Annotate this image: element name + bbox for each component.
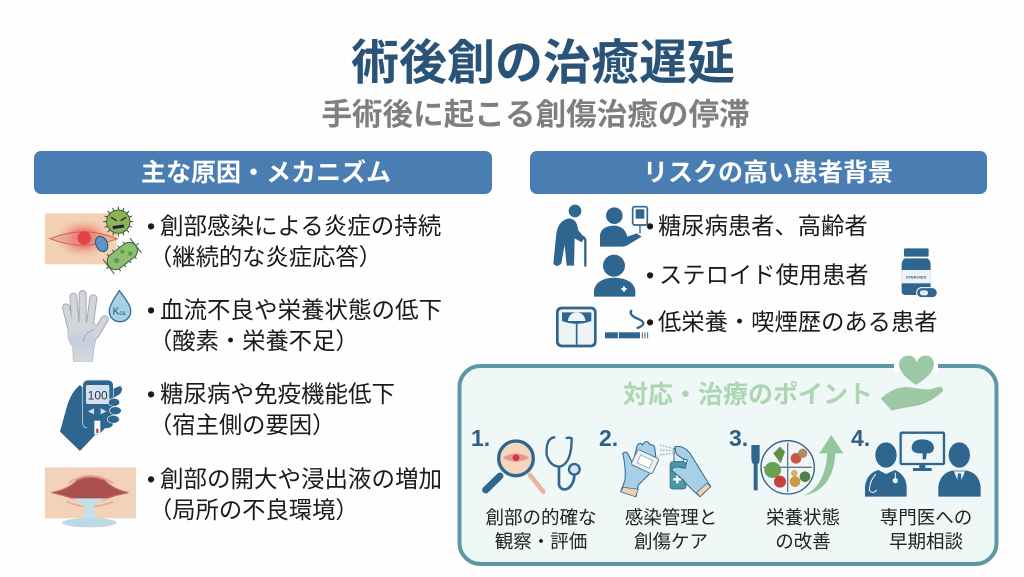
icon: magnifier and stethoscope [486,437,580,492]
text: blood flow: （酸素・栄養不足） [149,328,359,354]
step 1 [471,425,597,552]
subtitle: 手術後に起こる創傷治癒の停滞 [321,98,750,132]
number 3: 3. [729,425,748,451]
heading: risk [530,151,987,194]
icon: open wound with exudate [45,467,136,527]
text: diabetes: • [147,381,155,407]
icon: pale hand and potassium drop: ca [119,311,126,317]
icon: doctors with brain monitor [865,433,981,497]
caption 2 [625,507,717,552]
text: infection: （継続的な炎症応答） [149,244,382,270]
text: diabetes [147,381,395,438]
icon: patient with plus [594,255,635,297]
text: wound dehiscence: （局所の不良環境） [149,497,359,523]
icon: heart in hand [881,356,943,411]
step 4 [851,425,981,552]
caption 4 [880,507,972,552]
icon: steroid bottle: STEROIDS [906,274,927,279]
heading: causes [34,151,492,194]
icon: pale hand and potassium drop [66,291,131,361]
caption 3: 栄養状態 [766,507,840,528]
caption 3 [766,507,840,552]
caption 4: 専門医への [880,507,972,528]
title: 術後創の治癒遅延 [351,37,735,90]
callout box [460,366,996,564]
text: malnutrition and smoking: 低栄養・喫煙歴のある患者 [658,309,938,335]
text: nutrition bullet: • [646,309,654,335]
caption 2: 創傷ケア [634,531,708,552]
icon: pale hand and potassium drop: K [113,306,120,317]
icon: glucose meter in hand: 100 [88,388,108,402]
text: diabetic label: 糖尿病患者、高齢者 [658,213,868,239]
heading: treatment points: 対応・治療のポイント [623,381,873,409]
text: steroid users: ステロイド使用患者 [659,262,869,288]
panel: causes [34,151,492,527]
text: wound dehiscence: • [147,466,155,492]
icon: infected wound and bacteria [45,207,145,277]
text: blood flow: • [147,297,155,323]
text: infection [147,213,441,270]
icon: cigarette [605,310,648,338]
text: steroid bullet: • [646,262,654,288]
icon: elderly person with cane [553,205,585,266]
icon: gloves and disinfectant spray [621,442,711,497]
number 1: 1. [471,425,490,451]
panel: treatment points [460,356,996,564]
text: infection: 創部感染による炎症の持続 [160,213,441,239]
caption 1: 観察・評価 [495,531,587,552]
panel: risk [530,151,987,347]
caption 1: 創部の的確な [485,507,597,528]
border gap behind heart [894,360,938,372]
caption 4: 早期相談 [889,531,963,552]
heading: risk: リスクの高い患者背景 [643,159,893,187]
number 2: 2. [599,425,618,451]
icon: glucose meter in hand [60,380,122,451]
text: diabetes and elderly: • [646,213,654,239]
heading: causes: 主な原因・メカニズム [141,158,391,187]
text: diabetes: （宿主側の要因） [149,412,335,438]
number 4: 4. [851,425,870,451]
icon: fork, plate and up arrow [752,435,843,496]
text: blood flow: 血流不良や栄養状態の低下 [160,297,442,323]
caption 1 [485,507,597,552]
text: infection: • [147,213,155,239]
text: blood flow [147,297,442,354]
text: diabetes: 糖尿病や免疫機能低下 [160,381,395,407]
step 2 [599,425,717,552]
text: wound dehiscence [147,466,442,523]
icon: weight scale [556,307,597,347]
caption 3: の改善 [775,531,831,552]
step 3 [729,425,843,552]
caption 2: 感染管理と [625,507,717,528]
text: wound dehiscence: 創部の開大や浸出液の増加 [160,466,442,492]
icon: person with glucose device [600,207,647,247]
icon: steroid bottle [902,248,937,298]
